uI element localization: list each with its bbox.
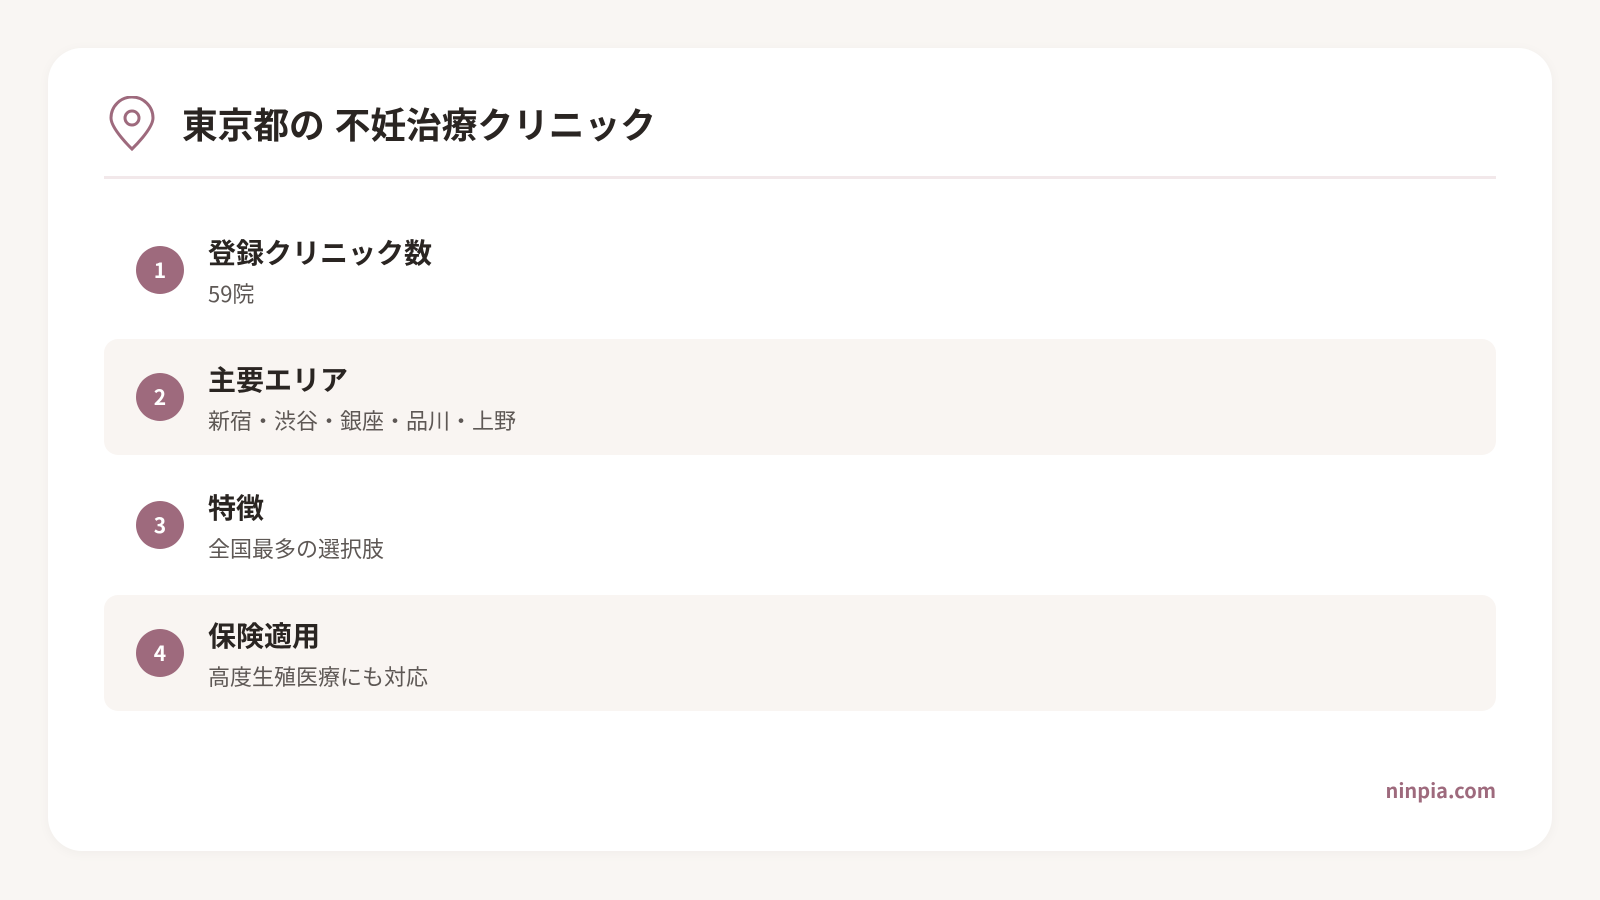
row 3 xyxy=(136,487,384,564)
text 3: 全国最多の選択肢 xyxy=(208,532,384,564)
badge 1: 1 xyxy=(154,255,166,285)
badge 2: 2 xyxy=(154,382,166,412)
heading 2: 主要エリア xyxy=(208,359,348,399)
badge 3 xyxy=(136,501,184,549)
title: 東京都の 不妊治療クリニック xyxy=(182,106,656,146)
heading 1: 登録クリニック数 xyxy=(208,232,432,272)
heading 3: 特徴 xyxy=(208,487,264,527)
badge 1 xyxy=(136,246,184,294)
row 1 xyxy=(136,232,432,309)
badge 2 xyxy=(136,373,184,421)
badge 3: 3 xyxy=(154,510,166,540)
row 2 xyxy=(104,339,1496,455)
text 2: 新宿・渋谷・銀座・品川・上野 xyxy=(208,404,516,436)
footer: source: ninpia.com xyxy=(1386,775,1496,804)
icon: map pin xyxy=(110,96,154,151)
text 1: 59院 xyxy=(208,277,254,309)
heading 4: 保険適用 xyxy=(208,615,320,655)
text 4: 高度生殖医療にも対応 xyxy=(208,660,428,692)
badge 4: 4 xyxy=(154,638,166,668)
badge 4 xyxy=(136,629,184,677)
row 4 xyxy=(104,595,1496,711)
